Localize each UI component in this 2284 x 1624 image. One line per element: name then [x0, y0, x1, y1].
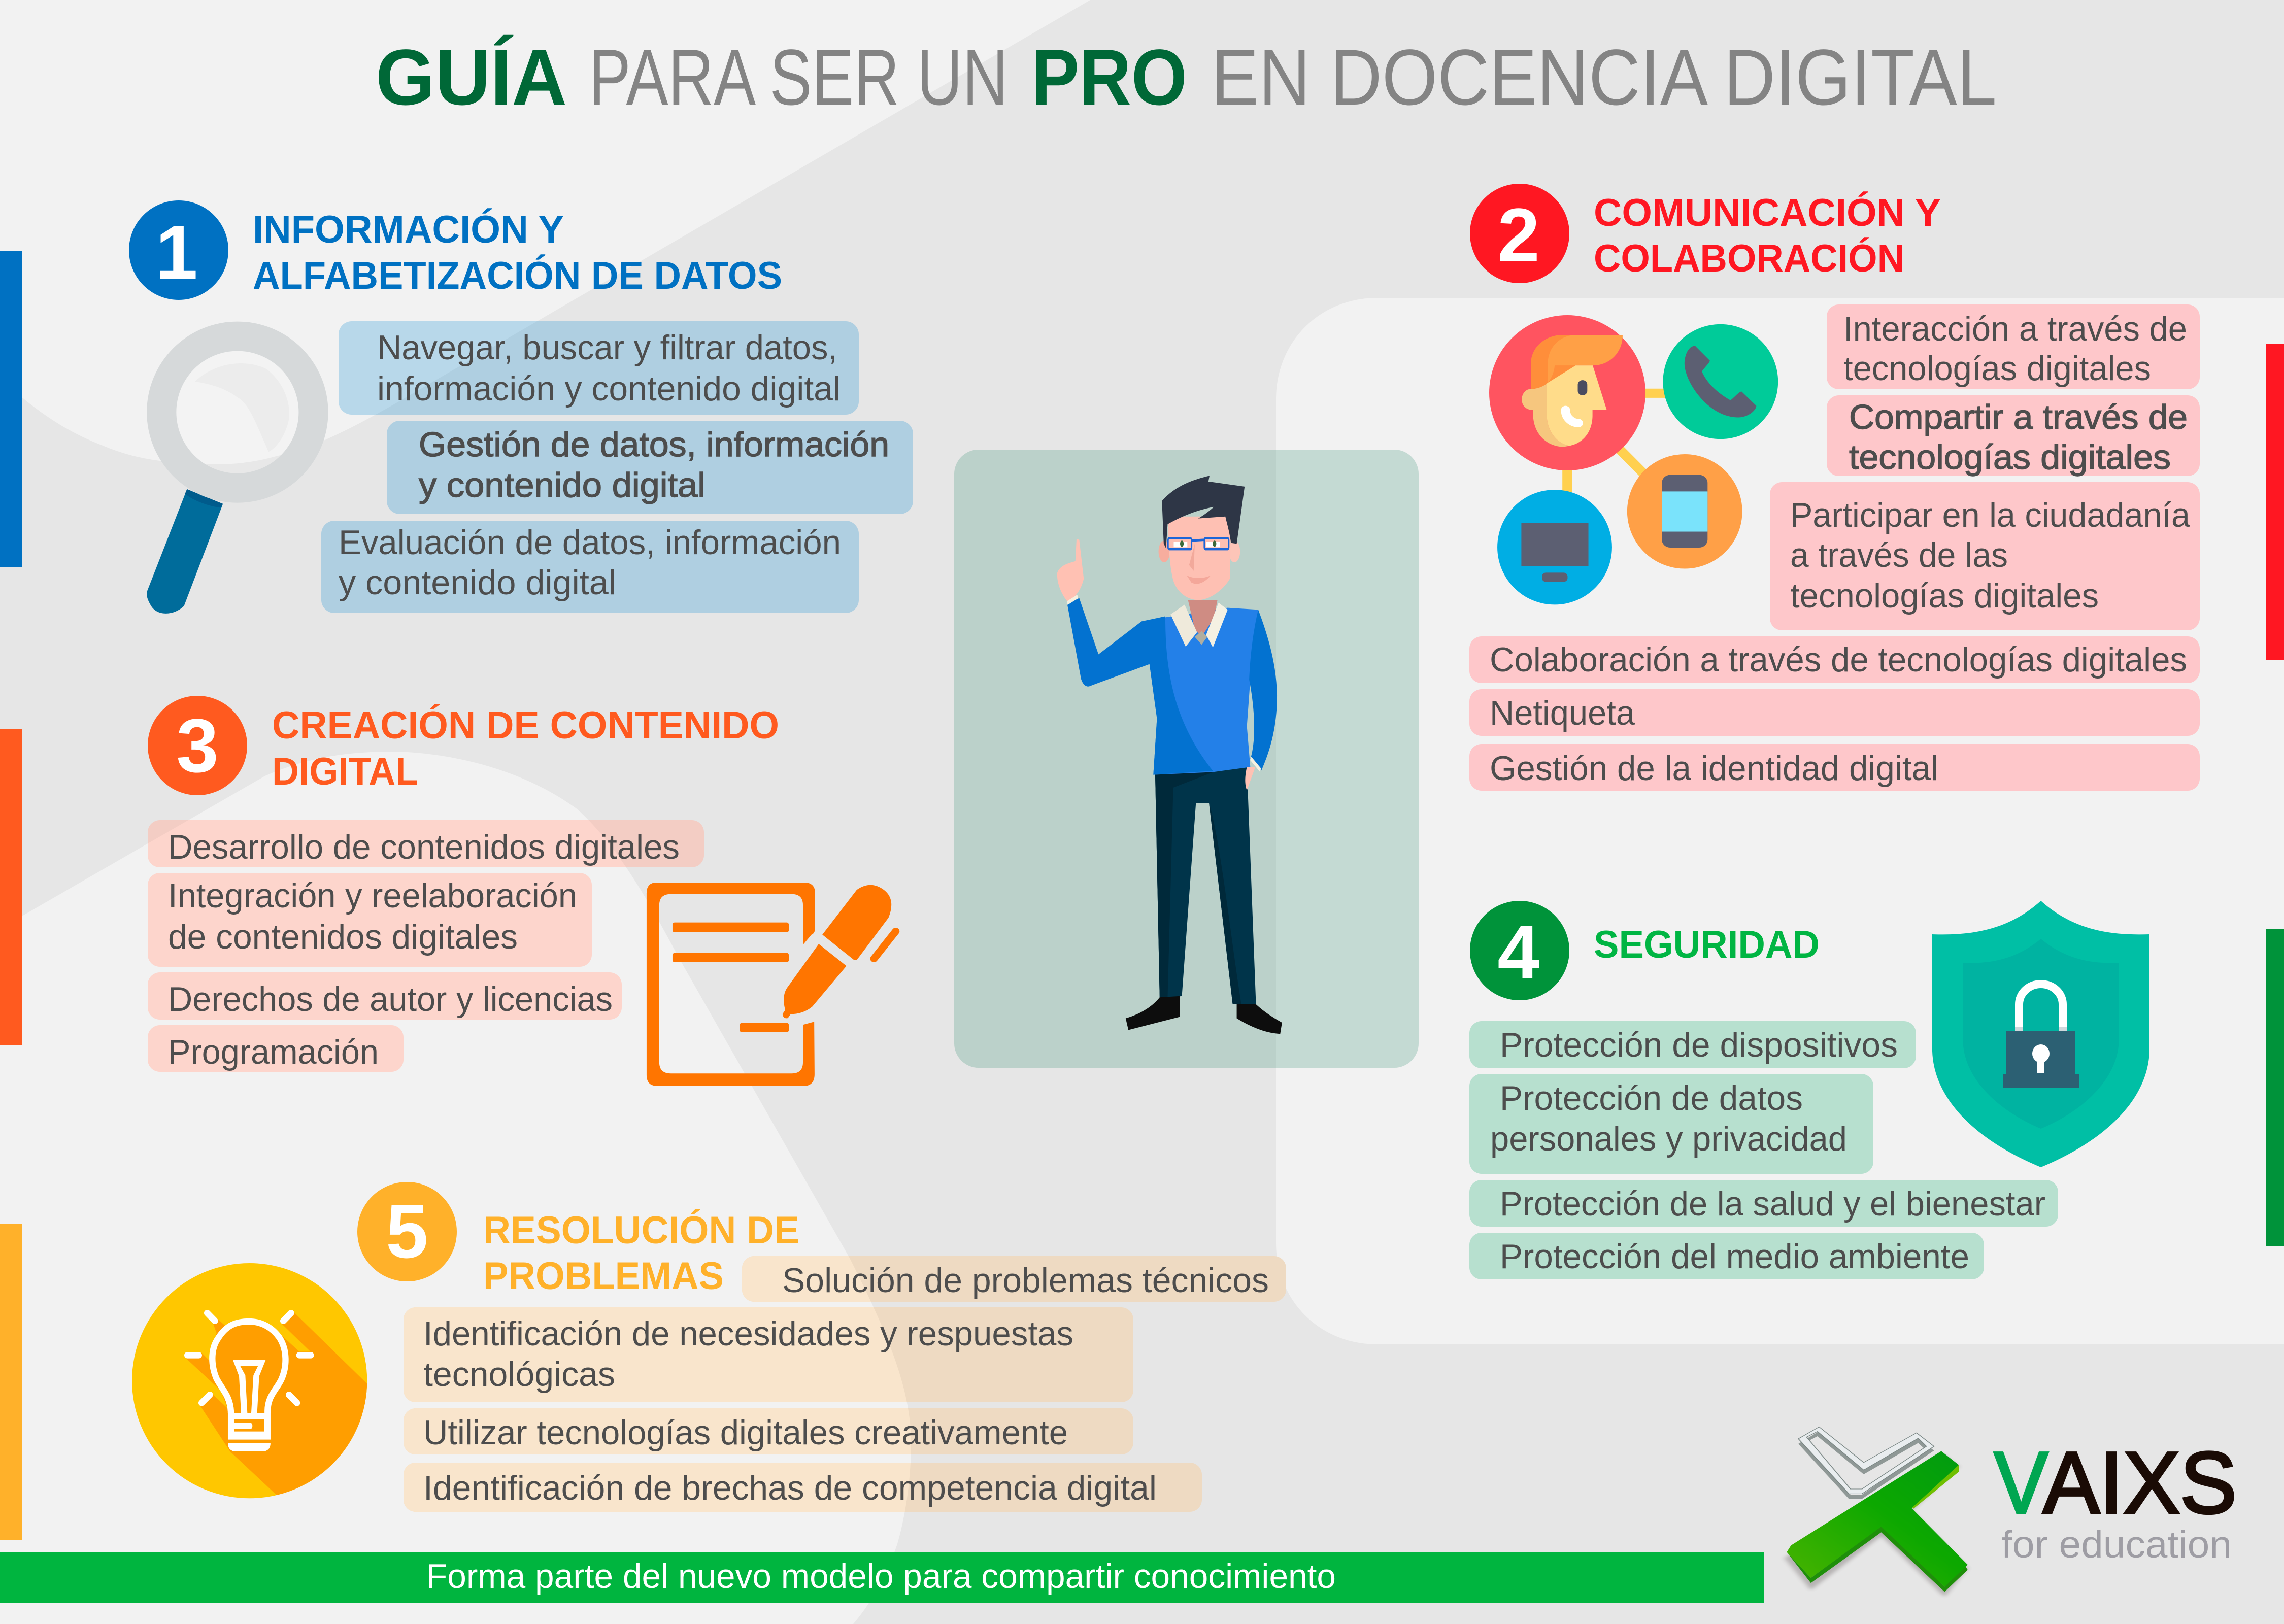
item: evaluación: Evaluación de datos, información — [339, 523, 841, 562]
icon: shield with padlock — [1932, 901, 2149, 1167]
item: brechas: Identificación de brechas de competencia digital — [423, 1469, 1157, 1507]
item: identificación de necesidades: tecnológicas — [423, 1355, 615, 1394]
number badge 4: 4 — [1497, 909, 1540, 995]
section 4: seguridad — [1469, 901, 2149, 1279]
item: interacción: tecnologías digitales — [1843, 349, 2151, 388]
item: datos personales: Protección de datos — [1500, 1079, 1803, 1118]
heading 1: INFORMACIÓN Y — [253, 208, 564, 251]
item: interacción — [1827, 304, 2200, 389]
item: participar: a través de las — [1790, 536, 2008, 574]
left colour bar: yellow — [0, 1224, 22, 1540]
item: medio ambiente: Protección del medio ambiente — [1500, 1237, 1969, 1276]
title: EN DOCENCIA DIGITAL — [1211, 33, 1997, 122]
item: navegar — [339, 321, 859, 415]
heading 3: CREACIÓN DE CONTENIDO — [272, 704, 779, 747]
heading 5: RESOLUCIÓN DE — [483, 1209, 799, 1252]
title: GUÍA — [376, 33, 567, 122]
icon: document and pen — [647, 883, 896, 1086]
item: salud: Protección de la salud y el bienestar — [1500, 1185, 2045, 1223]
section 1: información y alfabetización de datos — [129, 200, 913, 614]
item: datos personales — [1469, 1074, 1873, 1174]
wordmark: AIXS — [2043, 1434, 2237, 1532]
heading 5 — [483, 1209, 799, 1298]
item: participar: tecnologías digitales — [1790, 577, 2099, 615]
heading 1 — [253, 208, 782, 297]
item: identificación de necesidades — [404, 1307, 1133, 1402]
item: desarrollo: Desarrollo de contenidos digitales — [168, 828, 680, 866]
left colour bar: blue — [0, 251, 22, 567]
item: gestión de datos: y contenido digital — [419, 466, 706, 504]
heading 2: COLABORACIÓN — [1594, 237, 1904, 280]
number badge 3 — [148, 696, 247, 795]
heading 4: SEGURIDAD — [1594, 923, 1820, 966]
item: colaboración: Colaboración a través de tecnologías digitales — [1490, 640, 2187, 679]
item: gestión de datos: Gestión de datos, información — [419, 425, 889, 464]
item: participar — [1770, 482, 2200, 630]
section 3: creación de contenido digital — [148, 696, 896, 1086]
heading 2 — [1594, 191, 1941, 280]
item: integración — [148, 873, 592, 967]
icon: light bulb — [132, 1263, 369, 1499]
number badge 2: 2 — [1497, 192, 1540, 278]
item: netiqueta: Netiqueta — [1490, 694, 1635, 732]
item: netiqueta — [1469, 689, 2200, 736]
item: datos personales: personales y privacidad — [1490, 1120, 1847, 1158]
heading 5: PROBLEMAS — [483, 1255, 724, 1298]
item: integración: de contenidos digitales — [168, 918, 518, 956]
logo: VAIXS for education — [1785, 1427, 2237, 1597]
logo mark — [1785, 1427, 1968, 1597]
item: navegar: información y contenido digital — [377, 369, 841, 408]
wordmark: V — [1994, 1434, 2048, 1532]
number badge 1: 1 — [155, 210, 198, 295]
heading 3 — [272, 704, 779, 793]
item: compartir — [1827, 395, 2200, 477]
footer banner: Forma parte del nuevo modelo para compartir conocimiento — [426, 1557, 1336, 1596]
section 2: comunicación y colaboración — [1469, 184, 2200, 791]
number badge 2 — [1470, 184, 1569, 283]
title: PRO — [1031, 33, 1187, 122]
right colour bar: red — [2266, 344, 2284, 660]
section 5: resolución de problemas — [132, 1182, 1286, 1512]
title: PARA SER UN — [589, 33, 1008, 122]
number badge 5: 5 — [386, 1189, 428, 1274]
item: navegar: Navegar, buscar y filtrar datos, — [377, 328, 837, 367]
item: evaluación: y contenido digital — [339, 563, 616, 602]
number badge 1 — [129, 200, 228, 300]
heading 3: DIGITAL — [272, 750, 418, 793]
item: programación: Programación — [168, 1033, 379, 1071]
item: derechos: Derechos de autor y licencias — [168, 980, 613, 1019]
item: utilizar: Utilizar tecnologías digitales creativamente — [423, 1413, 1068, 1452]
footer banner — [0, 1552, 1764, 1603]
central panel with character — [954, 450, 1419, 1068]
item: evaluación — [321, 521, 859, 613]
item: identificación de necesidades: Identificación de necesidades y respuestas — [423, 1314, 1073, 1353]
number badge 4 — [1470, 901, 1569, 1000]
item: identidad digital — [1469, 744, 2200, 791]
title — [376, 33, 1997, 122]
item: participar: Participar en la ciudadanía — [1790, 496, 2190, 534]
illustration: teacher pointing up — [1057, 476, 1282, 1034]
item: gestión de datos — [387, 421, 913, 514]
item: identidad digital: Gestión de la identidad digital — [1490, 749, 1938, 788]
item: integración: Integración y reelaboración — [168, 876, 577, 915]
right colour bar: green — [2266, 929, 2284, 1246]
number badge 5 — [357, 1182, 457, 1281]
heading 2: COMUNICACIÓN Y — [1594, 191, 1941, 234]
item: compartir: tecnologías digitales — [1849, 438, 2171, 477]
icon: magnifying glass — [147, 322, 328, 614]
item: interacción: Interacción a través de — [1843, 310, 2187, 348]
item: programación — [148, 1025, 404, 1072]
heading 1: ALFABETIZACIÓN DE DATOS — [253, 254, 782, 297]
item: dispositivos: Protección de dispositivos — [1500, 1026, 1898, 1064]
wordmark: for education — [2001, 1523, 2232, 1566]
wordmark — [1994, 1434, 2237, 1566]
number badge 3: 3 — [176, 703, 219, 788]
left colour bar: orange — [0, 729, 22, 1045]
item: compartir: Compartir a través de — [1849, 398, 2188, 436]
item: solución: Solución de problemas técnicos — [782, 1261, 1269, 1300]
icon: communication network — [1489, 315, 1778, 604]
